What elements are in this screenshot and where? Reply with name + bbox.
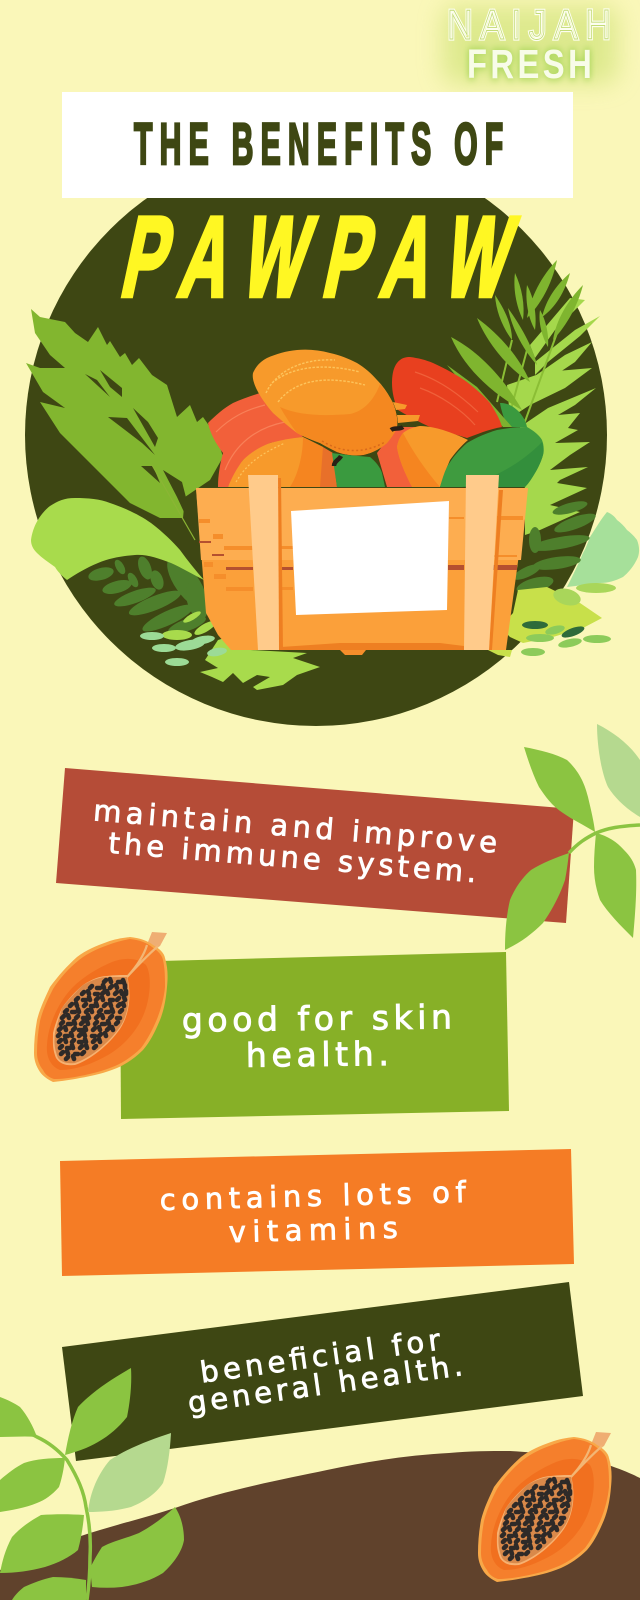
left dark fern <box>87 552 214 637</box>
mint leaf right <box>567 512 639 587</box>
title banner: THE BENEFITS OF <box>134 111 503 177</box>
green fruit small <box>332 453 385 487</box>
benefit 4: general health <box>62 1282 583 1461</box>
benefit 2: skin health <box>120 952 509 1119</box>
middle red fruit <box>377 427 423 487</box>
crate posts <box>248 475 279 650</box>
red fruit back right <box>392 357 502 438</box>
fruit pile <box>208 350 544 487</box>
benefit 3: vitamins <box>60 1149 574 1276</box>
logo: Naijah Fresh: FRESH <box>467 40 592 87</box>
benefit 3: vitamins: vitamins <box>228 1211 398 1249</box>
blank crate label <box>291 501 449 615</box>
right dark leaflets <box>511 499 598 597</box>
branch with leaves: upper right <box>505 724 640 950</box>
hero circle <box>25 144 607 726</box>
benefit 1: immune system: maintain and improve <box>92 793 499 860</box>
red-orange fruit back left <box>208 393 303 487</box>
wooden crate <box>196 475 528 655</box>
title: PAWPAW: PAWPAW <box>113 194 525 321</box>
logo: Naijah Fresh <box>442 2 618 87</box>
logo: Naijah Fresh: NAIJAH <box>447 2 611 49</box>
leaf strip behind green fruit <box>447 365 512 427</box>
logo: Naijah Fresh: NAIJAH <box>447 2 611 49</box>
illustration: crate of pawpaws with foliage <box>26 260 639 690</box>
green fruit right <box>440 427 544 487</box>
icon: halved papaya upper <box>34 932 168 1082</box>
icon: halved papaya lower <box>478 1432 612 1582</box>
benefit 3: vitamins: contains lots of <box>159 1175 467 1217</box>
light curled leaf left <box>31 498 204 580</box>
benefit 2: skin health: health. <box>246 1034 389 1075</box>
orange fruit right <box>397 426 468 487</box>
left bottom bush <box>140 609 320 690</box>
small scattered leaves right <box>488 583 616 657</box>
main orange fruit <box>253 350 397 455</box>
benefit 4: general health: beneficial for <box>198 1323 442 1390</box>
benefit 4: general health: general health. <box>186 1348 465 1420</box>
benefit 1: immune system: the immune system. <box>107 826 478 889</box>
right fern frond <box>451 260 600 535</box>
benefit 2: skin health: good for skin <box>182 997 452 1040</box>
logo: Naijah Fresh: FRESH <box>467 40 592 87</box>
benefit 1: immune system <box>56 768 574 923</box>
brown hill <box>0 1451 640 1600</box>
left large serrated leaf <box>26 309 223 540</box>
title banner <box>62 92 573 198</box>
fruit stems <box>391 427 403 430</box>
yellow-green bush right <box>500 587 602 643</box>
branch with leaves: lower left <box>0 1368 184 1600</box>
orange fruit lower left <box>228 437 325 487</box>
